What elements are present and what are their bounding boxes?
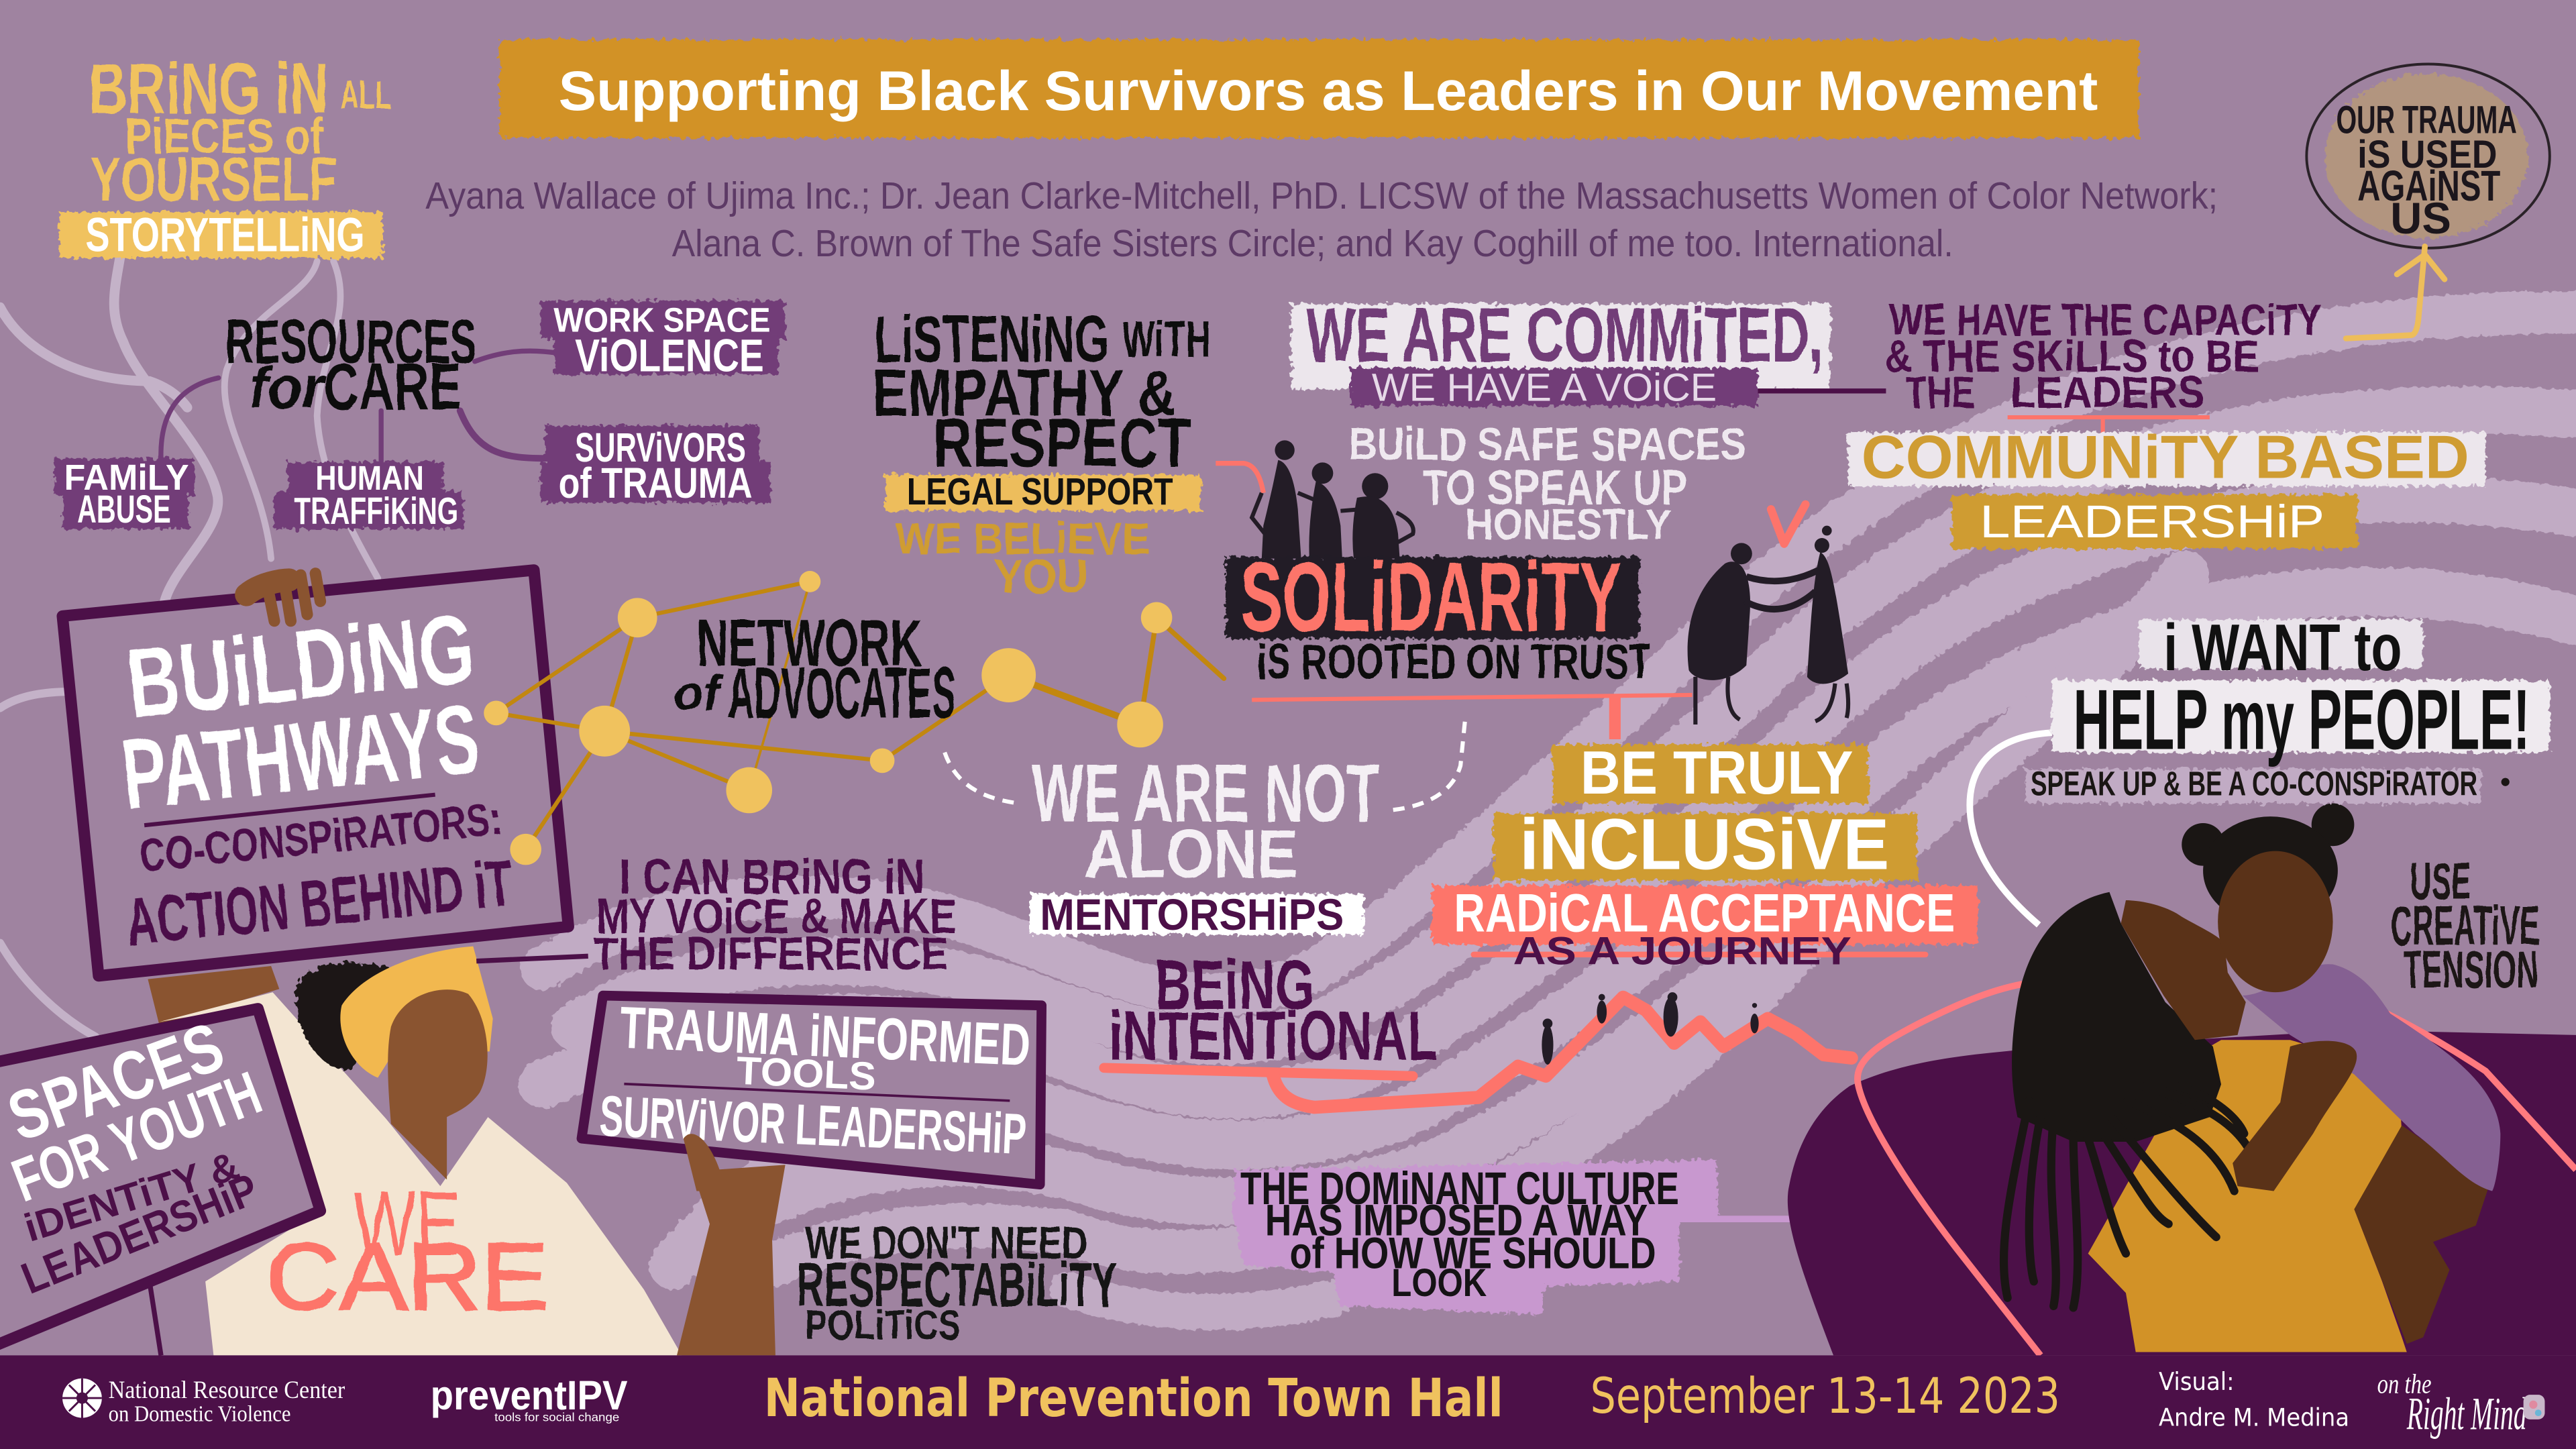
tag: work space violence: WORK SPACE [553,301,771,339]
white speech curve [1970,733,2052,925]
logo: on the right mind [2377,1369,2544,1440]
thin connector curves from storytelling [0,258,378,1036]
solidarity banner: SOLiDARiTY [1240,542,1621,652]
building pathways sign: CO-CONSPiRATORS: [137,792,504,882]
heading: resources for care: for [250,354,327,420]
mother's locks [2004,1084,2254,1307]
leadership banner [1951,494,2357,549]
dominant culture callout: THE DOMiNANT CULTURE [1240,1163,1679,1214]
we care shirt text [266,1173,549,1330]
child's face [2218,851,2333,992]
bring in all pieces of yourself: YOURSELF [91,144,337,214]
trauma circle callout [2306,64,2550,248]
listening with empathy and respect: RESPECT [933,405,1191,482]
spaces for youth sign [0,1008,321,1350]
trauma informed sign: TOOLS [735,1049,877,1099]
visual credit [2159,1367,2349,1432]
listening with empathy and respect: WiTH [1122,311,1211,368]
we believe you: YOU [994,551,1087,604]
we have the capacity text: & THE SKiLLS to BE [1884,331,2259,381]
logo: national resource center: on Domestic Violence [109,1401,290,1426]
tag: work space violence [541,301,786,381]
heading: network of advocates [674,606,956,733]
use creative tension [2390,851,2540,999]
listening with empathy and respect: LiSTENiNG [874,302,1109,376]
we are not alone [1032,747,1380,892]
being intentional: iNTENTiONAL [1109,998,1438,1075]
heading: resources for care: CARE [323,350,462,423]
footer bar [0,1355,2576,1449]
logo: preventipv: tools for social change [494,1410,619,1424]
bring in all pieces of yourself [89,48,391,214]
heading: network of advocates: ADVOCATES [728,652,956,733]
being intentional [1109,947,1438,1075]
inclusive banner: iNCLUSiVE [1519,804,1889,885]
spaces for youth sign: iDENTiTY & [19,1144,244,1250]
i can bring in my voice: THE DIFFERENCE [593,928,948,979]
solidarity banner [1226,542,1640,652]
storytelling label: STORYTELLiNG [85,209,365,262]
we are committed banner [1291,292,1830,410]
pink connector to solidarity figures [1216,464,1263,493]
head wrap [340,947,493,1078]
trauma circle callout: US [2390,194,2451,244]
logo: national resource center [62,1376,345,1426]
heading: network of advocates: NETWORK [696,606,922,680]
speakers subtitle [425,174,2218,264]
speakers subtitle: Alana C. Brown of The Safe Sisters Circle; and Kay Coghill of me too. International. [672,222,1953,264]
event name: National Prevention Town Hall [764,1368,1503,1429]
rooted on trust text: iS ROOTED ON TRUST [1256,633,1651,689]
bring in all pieces of yourself: ALL [340,74,391,117]
tag: survivors of trauma: SURViVORS [575,425,746,470]
face and neck [388,989,488,1179]
logo: preventipv: preventIPV [431,1373,628,1418]
we don't need respectability [797,1217,1117,1348]
i can bring in my voice: MY VOiCE & MAKE [596,888,956,944]
trauma circle callout: iS USED [2357,133,2497,176]
dark ground shape [1788,1030,2576,1355]
trauma informed sign: TRAUMA iNFORMED [619,994,1032,1078]
hair [295,963,394,1071]
we are not alone: WE ARE NOT [1032,747,1380,839]
mother's dress [2088,1040,2407,1352]
shirt [160,992,682,1355]
spaces for youth sign: FOR YOUTH [3,1059,270,1215]
tag: human trafficking: HUMAN [315,458,424,497]
as a journey: AS A JOURNEY [1513,930,1851,973]
build safe spaces text [1349,419,1746,548]
pink rule and tick [1252,695,1692,739]
tag: human trafficking [274,458,464,532]
use creative tension: USE [2410,851,2471,910]
child's shirt [2243,964,2500,1191]
arrow to trauma circle [2346,246,2445,338]
i want to help my people [2052,610,2550,767]
we are not alone: ALONE [1084,815,1298,892]
connector: voice to woman [476,956,588,961]
building pathways sign: PATHWAYS [117,684,484,830]
we don't need respectability: POLiTiCS [805,1302,961,1348]
pink outline around mother and child [1858,984,2576,1355]
icon: three linked people [1252,440,1413,559]
we believe you [896,514,1150,604]
network of advocates graph [484,571,1224,865]
heading: network of advocates: of [674,665,724,720]
tag: family abuse [54,458,194,531]
brush wave stripes [542,312,2576,1311]
figure: mother and child [2004,804,2500,1352]
heading: resources for care: RESOURCES [225,307,476,376]
we don't need respectability: WE DON'T NEED [805,1217,1087,1269]
building pathways sign: BUiLDiNG [122,593,480,739]
i can bring in my voice [593,849,956,979]
tag: family abuse: FAMiLY [64,458,189,498]
we believe you: WE BELiEVE [896,514,1150,564]
speakers subtitle: Ayana Wallace of Ujima Inc.; Dr. Jean Clarke-Mitchell, PhD. LICSW of the Massachusetts Women of Color Network; [425,174,2218,217]
connector: voice to capacity [1758,390,1886,392]
leadership banner: LEADERSHiP [1980,496,2324,547]
we are committed banner: WE HAVE A VOiCE [1372,366,1717,410]
we care shirt text: WE [354,1173,460,1275]
tag: human trafficking: TRAFFiKiNG [294,490,458,532]
legal support label: LEGAL SUPPORT [907,470,1173,513]
underline: leaders [2008,417,2210,437]
dominant culture callout: LOOK [1391,1261,1487,1305]
event date: September 13-14 2023 [1591,1368,2060,1425]
building pathways sign: ACTION BEHIND iT [123,846,516,960]
child's hair [2182,804,2354,925]
icon: hand holding sign [246,574,321,621]
figure: woman with signs [148,947,786,1355]
tag: survivors of trauma [541,425,771,507]
heading: resources for care [225,307,476,423]
icon: couple and heart [1688,504,1848,724]
dominant culture callout [1232,1160,1807,1314]
building pathways sign [62,570,568,976]
listening with empathy and respect: EMPATHY & [872,356,1176,430]
lower arm [677,1140,786,1355]
tag: survivors of trauma: of TRAUMA [559,460,753,507]
visual credit: Andre M. Medina [2159,1403,2349,1432]
we don't need respectability: RESPECTABiLiTY [797,1250,1117,1320]
journey path with small people [1104,992,1851,1108]
dominant culture callout: HAS IMPOSED A WAY [1265,1196,1648,1246]
raised arm [148,966,279,1025]
we have the capacity text: LEADERS [2011,368,2205,417]
resources for care connectors [161,351,559,462]
sign pole [150,1281,161,1355]
be truly banner: BE TRULY [1580,739,1853,807]
child's leg [2354,1126,2489,1344]
radical acceptance banner: RADiCAL ACCEPTANCE [1454,883,1955,944]
we have the capacity text [1884,296,2321,417]
tag: work space violence: ViOLENCE [575,329,764,381]
i can bring in my voice: I CAN BRiNG iN [619,849,925,904]
build safe spaces text: HONESTLY [1465,500,1671,548]
logo: national resource center: National Resource Center [109,1376,345,1403]
being intentional: BEiNG [1155,947,1314,1024]
dominant culture callout: of HOW WE SHOULD [1289,1229,1656,1279]
logo: on the right mind: on the [2377,1369,2431,1400]
we have the capacity text: WE HAVE THE CAPACiTY [1889,296,2321,345]
visual credit: Visual: [2159,1367,2235,1396]
trauma informed sign: SURViVOR LEADERSHiP [598,1084,1028,1167]
bring in all pieces of yourself: BRiNG iN [89,48,329,129]
hand over trauma sign [684,1134,720,1191]
mentorships label: MENTORSHiPS [1040,890,1344,940]
bring in all pieces of yourself: PiECES of [125,108,324,164]
spaces for youth sign: LEADERSHiP [15,1165,265,1304]
build safe spaces text: TO SPEAK UP [1423,460,1687,515]
we care shirt text: CARE [266,1224,549,1330]
community based banner: COMMUNiTY BASED [1862,424,2469,492]
mother's face [2121,900,2246,1040]
listening with empathy and respect [872,302,1211,482]
title banner: Supporting Black Survivors as Leaders in Our Movement [559,60,2098,122]
child's arm [2233,1041,2357,1191]
build safe spaces text: BUiLD SAFE SPACES [1349,419,1746,470]
spaces for youth sign: SPACES [0,1008,233,1156]
tag: family abuse: ABUSE [77,488,171,531]
trauma circle callout: AGAiNST [2357,162,2500,210]
title banner [499,40,2139,138]
trauma informed sign [582,993,1042,1185]
mother's hair [2012,892,2221,1142]
i want to help my people: i WANT to [2163,610,2402,684]
dashed connectors [945,716,1465,810]
we are committed banner: WE ARE COMMiTED, [1306,292,1823,378]
we have the capacity text: THE [1906,368,1975,417]
